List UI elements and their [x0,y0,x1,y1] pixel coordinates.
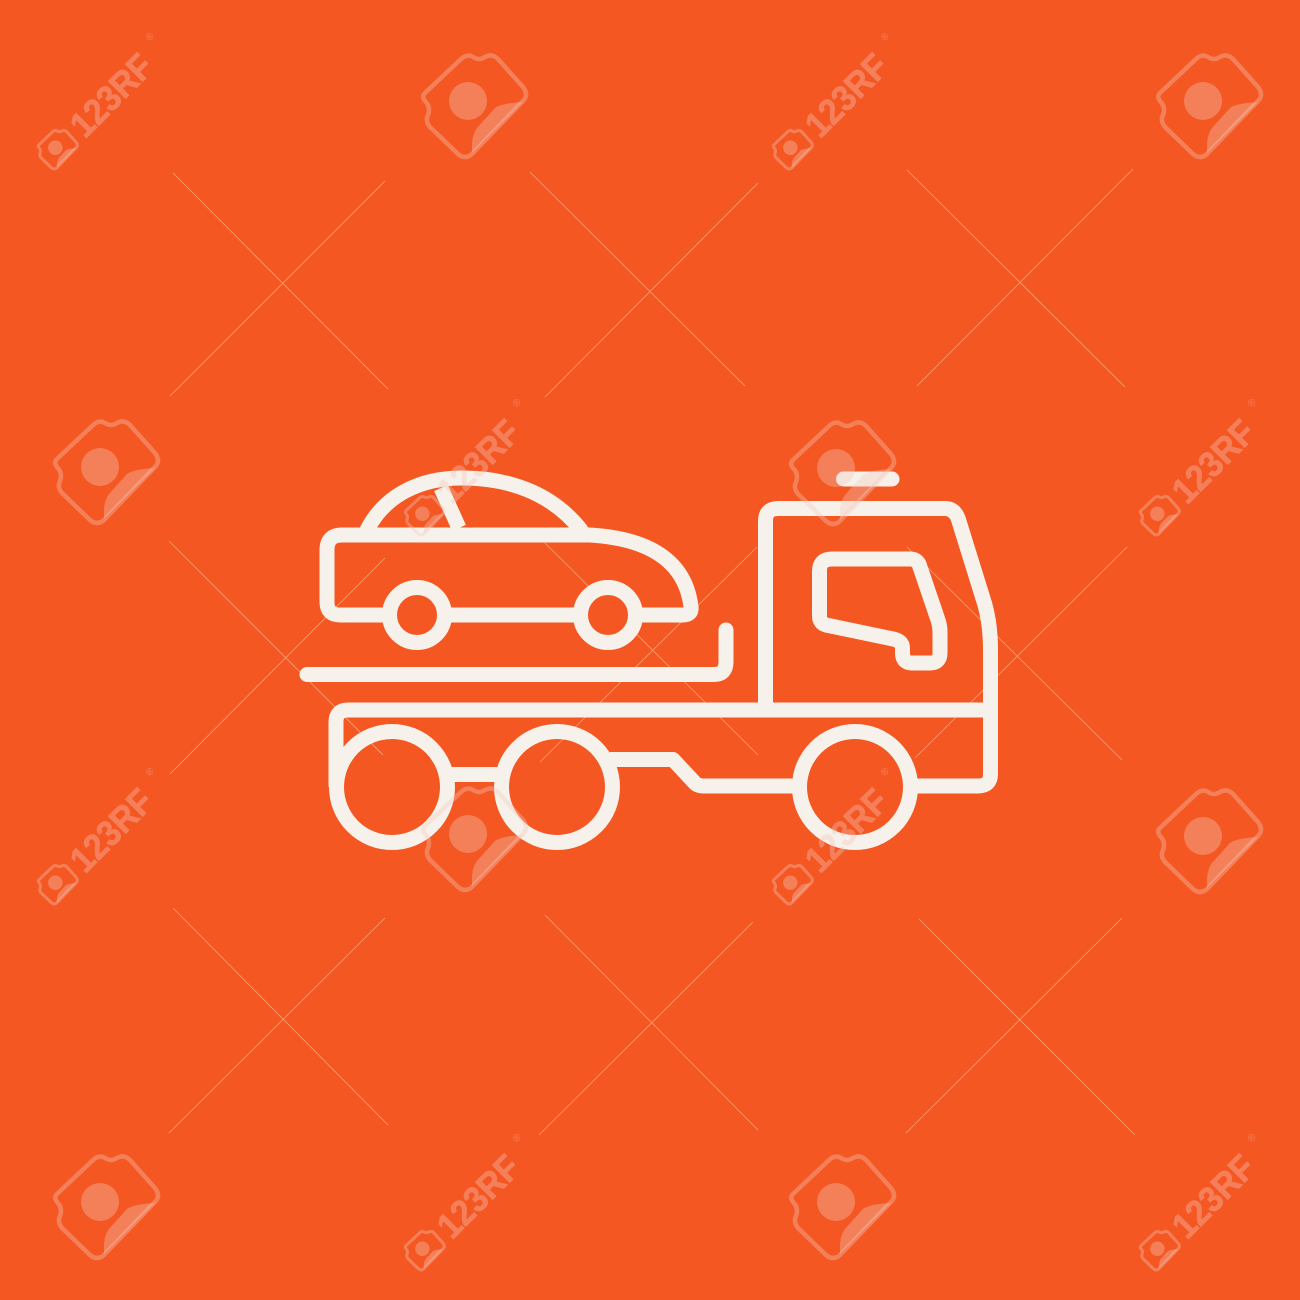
watermark: 123RF wordmarks: ® [1246,1131,1259,1145]
truck cab [766,508,990,710]
watermark: 123RF wordmarks: ® [879,765,892,779]
watermark: 123RF wordmarks: 123RF [62,781,161,880]
watermark: 123RF wordmarks: ® [144,30,157,44]
watermark: 123RF wordmarks: 123RF [1164,412,1263,511]
wheel axle [447,767,502,782]
watermark: 123RF wordmarks: ® [144,765,157,779]
watermark: 123RF wordmarks: 123RF [429,1147,528,1246]
watermark: 123RF wordmarks: 123RF [429,412,528,511]
car body [327,535,691,615]
icon: tow truck carrying a car [307,478,990,842]
car front wheel [580,588,636,642]
watermark: 123RF wordmarks: 123RF [62,46,161,145]
car roof [367,478,581,530]
truck chassis [336,650,990,787]
truck wheel: front [800,732,910,842]
watermark: 123RF wordmarks: ® [511,1131,524,1145]
watermark: 123RF wordmarks: ® [1246,396,1259,410]
truck wheel: rear [336,732,448,842]
watermark: 123RF wordmarks: ® [879,30,892,44]
watermark: 123RF wordmarks: 123RF [797,46,896,145]
watermark: 123RF wordmarks: ® [511,396,524,410]
roof beacon [844,472,892,486]
watermark: 123RF wordmarks: 123RF [1164,1147,1263,1246]
car rear wheel [390,588,444,642]
watermark: 123RF wordmarks: 123RF [797,781,896,880]
truck wheel: middle [502,732,612,842]
cab window [820,559,940,663]
car on flatbed [327,478,691,642]
flatbed ramp [307,630,726,674]
car window pillar [441,488,459,528]
